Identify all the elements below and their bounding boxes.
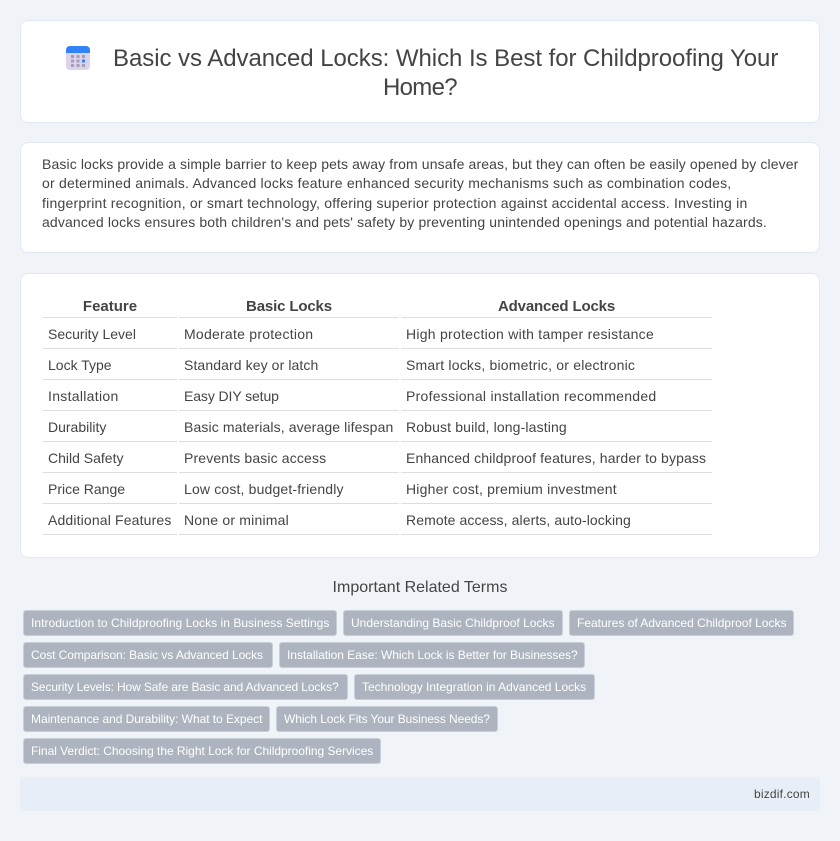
panel: comparison table: Professional installation recommended [406,388,656,404]
panel: comparison table: Remote access, alerts, auto-locking [406,512,631,528]
panel: comparison table: Prevents basic access [184,450,326,466]
panel: comparison table: High protection with tamper resistance [406,326,654,342]
text: Maintenance and Durability: What to Expect [31,712,262,726]
related term tags [23,610,794,764]
intro paragraph: advanced locks ensures both children's and pets' safety by preventing unintended openings and potential hazards. [42,214,767,230]
intro paragraph: fingerprint recognition, or smart technology, offering superior protection against accidental access. Investing in [42,195,748,211]
row: lock type [48,357,635,373]
panel: comparison table: Basic Locks [246,298,332,315]
panel: comparison table: Easy DIY setup [184,388,279,404]
panel: comparison table: Low cost, budget-friendly [184,481,344,497]
panel: comparison table: Feature [83,298,137,315]
text: Features of Advanced Childproof Locks [577,616,786,630]
panel: comparison table: Price Range [48,481,125,497]
text: Installation Ease: Which Lock is Better for Businesses? [287,648,578,662]
text: Cost Comparison: Basic vs Advanced Locks [31,648,263,662]
panel: comparison table: Moderate protection [184,326,313,342]
row: price range [48,481,617,497]
icon: calendar [66,46,90,70]
panel: intro text [20,142,820,253]
panel: comparison table: Durability [48,419,106,435]
text: Understanding Basic Childproof Locks [351,616,554,630]
text: Introduction to Childproofing Locks in Business Settings [31,616,329,630]
row: installation [48,388,656,404]
text: Which Lock Fits Your Business Needs? [284,712,490,726]
panel: comparison table: Lock Type [48,357,112,373]
panel: comparison table: Installation [48,388,119,404]
panel: comparison table: None or minimal [184,512,289,528]
panel: comparison table: Child Safety [48,450,123,466]
title: Basic vs Advanced Locks: Which Is Best for Childproofing Your [113,44,778,72]
text: Security Levels: How Safe are Basic and Advanced Locks? [31,680,339,694]
row: security level [48,326,654,342]
panel: comparison table [20,273,820,558]
panel: comparison table: Smart locks, biometric, or electronic [406,357,635,373]
heading: related terms: Important Related Terms [333,579,507,596]
row: durability [48,419,567,435]
text: Final Verdict: Choosing the Right Lock for Childproofing Services [31,744,373,758]
panel: header [20,20,820,123]
panel: comparison table: Additional Features [48,512,171,528]
panel: comparison table: Advanced Locks [498,298,615,315]
panel: comparison table: Robust build, long-lasting [406,419,567,435]
panel: comparison table: Security Level [48,326,136,342]
footer site name: bizdif.com [754,787,810,801]
panel: comparison table: Basic materials, average lifespan [184,419,393,435]
text: Technology Integration in Advanced Locks [362,680,586,694]
row: child safety [48,450,706,466]
row: additional features [48,512,631,528]
title: Home? [383,74,457,100]
panel: comparison table: Standard key or latch [184,357,318,373]
intro paragraph: or determined animals. Advanced locks feature enhanced security mechanisms such as combination codes, [42,175,731,191]
intro paragraph [42,156,798,230]
title [113,44,778,100]
table header [83,298,615,315]
panel: comparison table: Higher cost, premium investment [406,481,617,497]
panel: comparison table: Enhanced childproof features, harder to bypass [406,450,706,466]
footer bar [20,777,820,811]
intro paragraph: Basic locks provide a simple barrier to keep pets away from unsafe areas, but they can often be easily opened by clever [42,156,798,172]
